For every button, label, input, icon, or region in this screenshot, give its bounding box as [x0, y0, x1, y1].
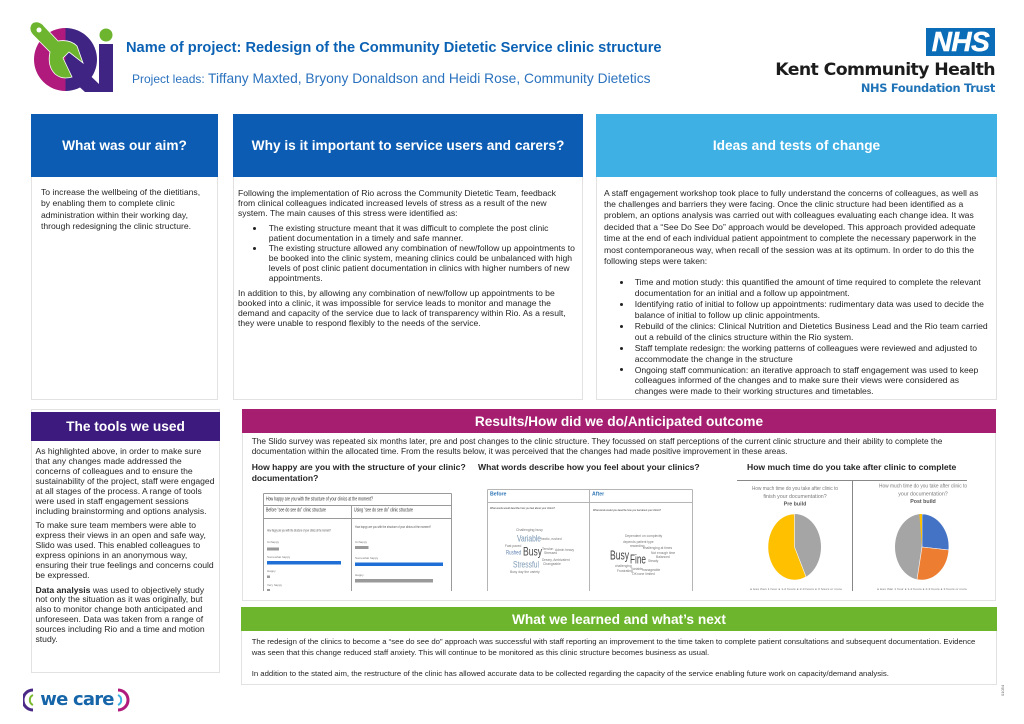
heading: aim — [31, 114, 218, 177]
chart: pies: Pre build — [784, 502, 806, 508]
chart: word clouds: challenging — [615, 564, 632, 568]
heading: results — [242, 409, 996, 433]
text: tools: at all stages of the process. A range of tools — [36, 486, 202, 496]
text: tools: concerns of colleagues and to ensure the — [36, 466, 193, 476]
text: next: In addition to the stated aim, the restructure of the clinic has allowed accurate data to be collected regarding the capacity of the service enabling future work on capacity/demand analysis. — [252, 668, 889, 678]
list: steps: colleagues informed of the changes and to make sure their views were considered as — [635, 375, 959, 385]
chart: happiness bars: Somewhat happy — [267, 555, 291, 559]
text: data analysis: not only the situation as it was originally, but — [36, 594, 203, 604]
chart: word clouds: depends patient type — [623, 540, 654, 544]
text: data analysis: unforeseen. Data was taken from a range of — [36, 614, 203, 624]
text: slido: To make sure team members were able to — [36, 520, 196, 530]
subheading: happy: How happy are you with the structure of your clinic? — [252, 462, 466, 472]
chart: happiness bars: Happy — [355, 573, 364, 577]
chart: happiness bars: How happy are you with the structure of your clinics at the moment? — [266, 496, 373, 502]
list: steps: out a rebuild of the clinics structure within the Rio system. — [635, 332, 853, 342]
chart: pies: your documentation? — [898, 492, 948, 498]
chart: word clouds: none limited — [637, 572, 655, 576]
list: steps: Ongoing staff communication: an iterative approach to staff engagement was used to keep — [635, 364, 978, 374]
text: aim — [41, 187, 200, 231]
chart: word clouds: Rushed — [506, 550, 521, 556]
logo: NHS: NHS — [932, 26, 989, 57]
chart: word clouds: Variable — [517, 534, 541, 544]
list: causes: be booked into the clinic system, meaning clinics could be unbalanced with high — [269, 253, 572, 263]
heading: ideas — [596, 114, 997, 177]
text: data analysis — [36, 584, 205, 644]
text: why conclusion: In addition to this, by allowing any combination of new/follow up appointments to be — [238, 288, 555, 298]
text: learned: The redesign of the clinics to become a “see do see do” approach was successful with staff reporting an improvement to the time taken to complete patient consultations and subsequent documentation. Evidence — [252, 637, 975, 646]
text: aim: administration within their working day, — [41, 210, 188, 220]
text: data analysis: also to monitor change both anticipated and — [36, 604, 202, 614]
text: slido — [36, 520, 214, 580]
text: slido: ensuring their true feelings and concerns could — [36, 560, 214, 570]
text: ideas intro: most contemporaneous way, when recall of the session was at its optimum. In order to do this the — [604, 245, 974, 255]
chart: word clouds: rewarding — [630, 544, 645, 548]
heading: why important — [233, 114, 583, 177]
chart: happiness bars: Using “see do see do” clinic structure — [354, 508, 413, 514]
text: results intro — [252, 437, 942, 456]
text: why conclusion: booked into a clinic, it was impossible for service leads to monitor and manage the — [238, 298, 551, 308]
panel: tools — [31, 409, 220, 673]
chart: happiness bars: Happy — [267, 569, 276, 573]
chart: word clouds: Changeable — [543, 562, 561, 566]
heading: tools — [31, 412, 220, 441]
chart: pies — [737, 480, 968, 591]
chart: word clouds: Tension — [542, 547, 554, 551]
heading: results: Results/How did we do/Anticipated outcome — [475, 414, 763, 428]
chart: word clouds: Fast paced — [505, 544, 521, 548]
panel: ideas — [596, 114, 997, 400]
list: steps: documentation for an initial and a follow up appointment. — [635, 288, 850, 298]
text: why intro — [238, 188, 556, 218]
text: why conclusion — [238, 288, 566, 328]
chart: happiness bars: Before “see do see do” clinic structure — [266, 508, 326, 514]
chart: word clouds: Stressed — [544, 551, 557, 555]
chart: word clouds: What words would describe how you feel about your clinics? — [490, 506, 555, 510]
list: steps: Rebuild of the clinics: Clinical Nutrition and Dietetics Business Lead and the Rio team carried — [635, 321, 988, 331]
text: why intro: Following the implementation of Rio across the Community Dietetic Team, feedback — [238, 188, 556, 198]
chart: word clouds: challenging at times — [643, 546, 672, 550]
chart: word clouds: Fine — [630, 552, 646, 566]
chart: word clouds: Admin heavy — [555, 548, 574, 552]
text: data analysis: study. — [36, 634, 58, 644]
list: causes: The existing structure allowed any combination of new/follow up appointments to — [269, 243, 575, 253]
chart: word clouds: Stressful — [513, 560, 539, 570]
chart: word clouds — [487, 489, 693, 591]
text: results intro: The Slido survey was repeated six months later, pre and post changes to the clinic structure. They focussed on staff perceptions of the current clinic structure and their ability to complete the — [252, 437, 942, 446]
list: causes: levels of post clinic patient documentation in clinics with higher numbers of new — [269, 263, 570, 273]
chart: pies: ● less than 1 hour ● 1-2 hours ● 2-3 hours ● 3 hours or more — [750, 587, 843, 591]
heading: why important: Why is it important to service users and carers? — [252, 138, 564, 153]
chart: word clouds: Before — [490, 492, 507, 498]
chart: word clouds: Dreary, Ambivalent — [542, 558, 570, 562]
chart: word clouds: Variable — [631, 567, 643, 571]
chart: word clouds: Challenging busy — [516, 528, 543, 532]
chart: word clouds: Balanced — [656, 555, 670, 559]
chart: word clouds: OK — [632, 572, 638, 576]
chart: pies: How much time do you take after clinic to — [879, 484, 967, 490]
text: slido: be expressed. — [36, 570, 89, 580]
chart: word clouds: Steady — [648, 559, 659, 563]
chart: pies: ● less than 1 hour ● 1-2 hours ● 2-3 hours ● 3 hours or more — [877, 587, 968, 591]
panel: why important — [233, 114, 583, 400]
text: ideas intro: A staff engagement workshop took place to fully understand the concerns of colleagues, as well as — [604, 188, 978, 198]
chart: happiness bars: Unhappy — [267, 540, 280, 544]
chart: word clouds: What words would you describe how you feel about your clinics? — [593, 508, 661, 512]
chart: pies: finish your documentation? — [763, 494, 827, 500]
title: Name of project: Redesign of the Community Dietetic Service clinic structure — [126, 40, 662, 56]
list: steps: Identifying ratio of initial to follow up appointments: rudimentary data was used to decide the — [635, 299, 984, 309]
text: tools: were used in staff engagement sessions — [36, 496, 189, 506]
subheading: words: What words describe how you feel about your clinics? — [478, 462, 700, 472]
reference code: 01054 — [1000, 685, 1005, 696]
list: causes — [253, 223, 575, 283]
text: tools: including brainstorming and options analysis. — [36, 506, 207, 516]
subheading: time: How much time do you take after clinic to complete — [747, 462, 956, 472]
chart: word clouds: Busy — [610, 548, 630, 562]
text: ideas intro: following steps were taken: — [604, 256, 707, 266]
project leads: Project leads: Tiffany Maxted, Bryony Donaldson and Heidi Rose, Community Dietetics — [132, 71, 651, 86]
text: slido: express their views in an open and safe way, — [36, 530, 206, 540]
list: steps: accommodate the change in the structure — [635, 354, 793, 364]
text: data analysis: sources including Rio and a time and motion — [36, 624, 205, 634]
heading: learned: What we learned and what’s next — [512, 612, 726, 626]
subheading: happy — [252, 462, 466, 483]
chart: word clouds: hectic, rushed — [541, 537, 562, 541]
chart: word clouds: Frustrating — [617, 569, 633, 573]
text: why intro: system. The main causes of this stress were identified as: — [238, 208, 458, 218]
text: aim: by enabling them to complete clinic — [41, 198, 175, 208]
subheading: happy: documentation? — [252, 473, 318, 483]
text: aim: To increase the wellbeing of the dietitians, — [41, 187, 200, 197]
list: steps: Time and motion study: this quantified the amount of time required to complete the relevant — [635, 277, 981, 287]
text: why conclusion: they were unable to respond flexibly to the needs of the service. — [238, 318, 481, 328]
text: slido: Slido was used. This enabled colleagues to — [36, 540, 200, 550]
heading: ideas: Ideas and tests of change — [713, 138, 880, 153]
text: ideas intro: time at the end of each individual patient appointment to complete the necessary paperwork in the — [604, 233, 976, 243]
chart: pies: Post build — [910, 499, 936, 505]
text: tools: sustainability of the project, staff were engaged — [36, 476, 214, 486]
chart: pies: How much time do you take after clinic to — [752, 486, 838, 492]
text: slido: express opinions in an anonymous way, — [36, 550, 187, 560]
logo: QI — [30, 22, 113, 92]
chart: word clouds: Dependent on complexity — [625, 534, 663, 538]
text: aim: through redesigning the clinic structure. — [41, 221, 191, 231]
heading: aim: What was our aim? — [62, 138, 187, 153]
panel: aim — [31, 114, 218, 400]
text: learned — [252, 637, 975, 657]
list: causes: patient documentation in a timely and safe manner. — [269, 233, 463, 243]
heading: tools: The tools we used — [66, 419, 185, 434]
list: steps: balance of initial to follow up clinic appointments. — [635, 310, 820, 320]
list: steps: changes were made to their working structures and timetables. — [635, 386, 874, 396]
logo: we care — [23, 688, 130, 712]
text: why conclusion: demand and capacity of the service due to lack of transparency within Rio. As a result, — [238, 308, 566, 318]
chart: word clouds: manageable — [642, 568, 660, 572]
chart: happiness bars: Somewhat happy — [355, 556, 379, 560]
list: causes: appointments. — [269, 273, 323, 283]
logo: Kent Community Health: Kent Community Health — [775, 60, 995, 80]
text: results intro: documentation within the allocated time. From the results below, it was perceived that the changes had made positive improvement in these areas. — [252, 447, 787, 456]
list: causes: The existing structure meant that it was difficult to complete the post clinic — [269, 223, 548, 233]
text: ideas intro: problem, an options analysis was carried out with colleagues evaluating each change idea. It was — [604, 210, 974, 220]
text: data analysis: Data analysis was used to objectively study — [36, 584, 204, 594]
text: learned: was seen that this change reduced staff anxiety. This will continue to be monitored as this clinic structure becomes business as usual. — [252, 648, 709, 657]
text: tools: that any changes made addressed the — [36, 456, 182, 466]
panel: learned — [241, 607, 997, 685]
logo: we care: we care — [40, 689, 114, 710]
chart: happiness bars — [263, 493, 452, 591]
list: steps — [620, 277, 988, 396]
logo: NHS Foundation Trust: NHS Foundation Trust — [861, 81, 995, 95]
text: why intro: from clinical colleagues indicated increased levels of stress as a result of the new — [238, 198, 547, 208]
list: steps: Staff template redesign: the working patterns of colleagues were reviewed and adjusted to — [635, 343, 977, 353]
text: ideas intro: decided that a “See Do See Do” approach would be developed. This approach provided adequate — [604, 222, 976, 232]
chart: happiness bars: Very happy — [267, 583, 283, 587]
text: ideas intro — [604, 188, 978, 266]
text: ideas intro: the challenges and barriers they were facing. Once the clinic structure had been identified as a — [604, 199, 963, 209]
text: tools: As highlighted above, in order to make sure — [36, 446, 201, 456]
chart: word clouds: Not enough time — [651, 551, 675, 555]
chart: word clouds: Busy — [523, 544, 542, 558]
chart: word clouds: After — [592, 492, 604, 498]
chart: happiness bars: Unhappy — [355, 540, 368, 544]
heading: learned — [241, 607, 997, 631]
chart: happiness bars: How happy are you with the structure of your clinics at the moment? — [267, 528, 331, 532]
chart: word clouds: Busy day the variety — [510, 570, 540, 574]
text: tools — [36, 446, 214, 516]
panel: results — [242, 409, 996, 601]
